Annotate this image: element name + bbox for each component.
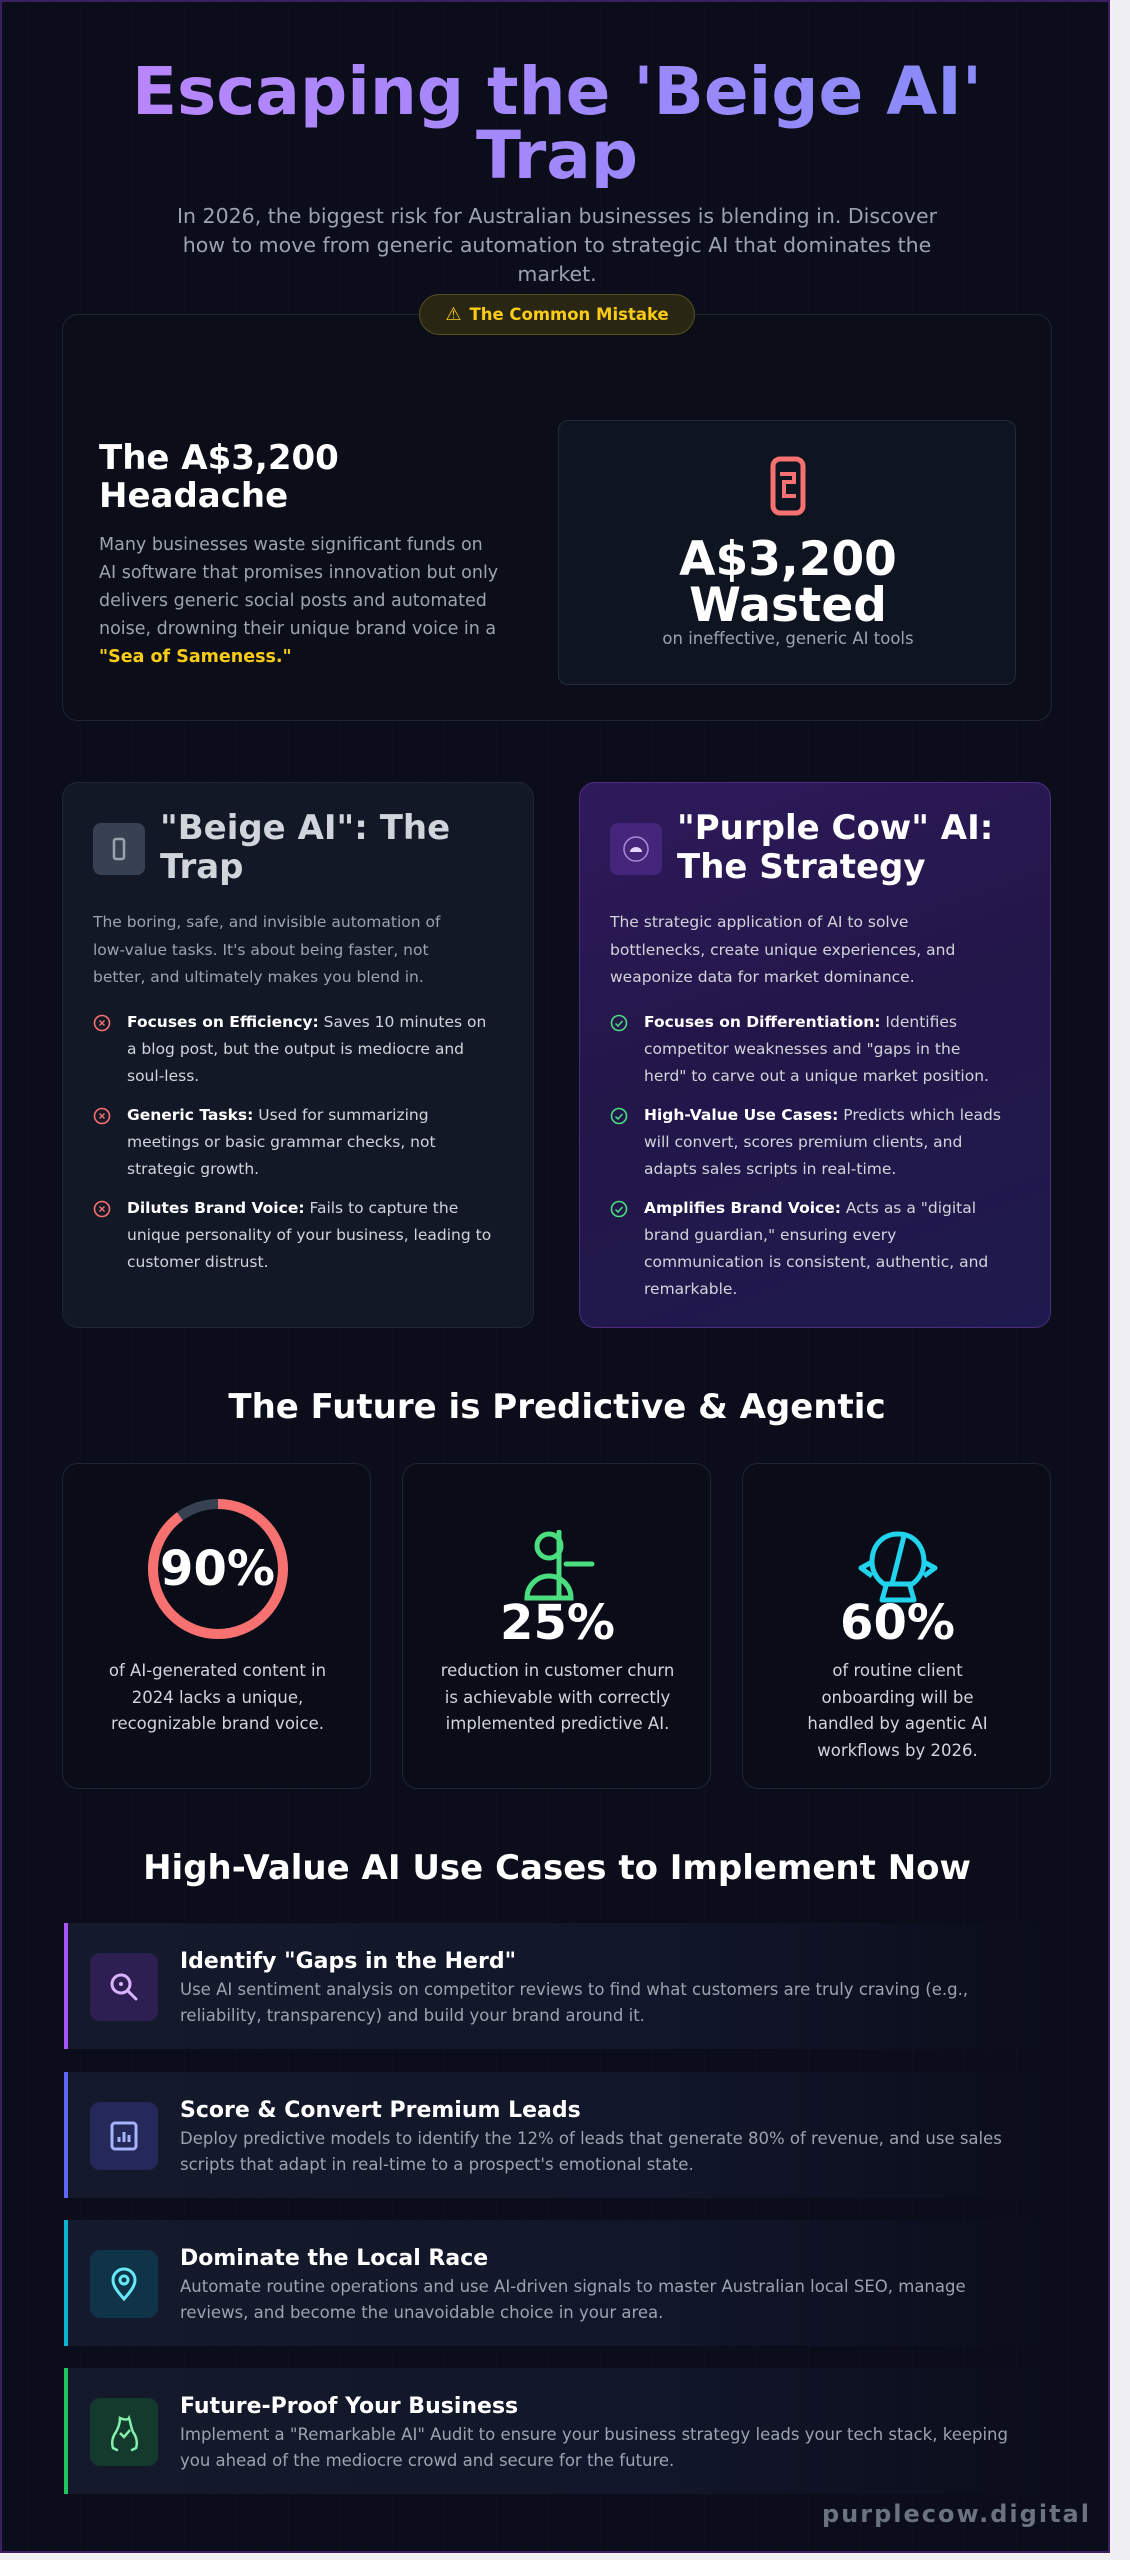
text: local: Automate routine operations and use AI-driven signals to master Australian local SEO, manage reviews, and become the unavoidable choice in your area. [180,2277,966,2322]
text: gaps: Use AI sentiment analysis on competitor reviews to find what customers are truly craving (e.g., reliability, transparency) and build your brand around it. [180,1980,968,2025]
icon: user minus [524,1530,594,1600]
badge: common mistake: The Common Mistake [469,305,669,324]
text: leads: Deploy predictive models to identify the 12% of leads that generate 80% of revenue, and use sales scripts that adapt in real-time to a prospect's emotional state. [180,2129,1002,2174]
use case: premium leads [64,2072,1054,2198]
text: headache description: "Sea of Sameness." [99,647,292,667]
icon: red phone [770,456,806,516]
panel: beige AI [62,782,534,1328]
heading: purple cow: The Strategy [677,847,926,887]
list: beige bullets: Focuses on Efficiency: Saves 10 minutes on a blog post, but the output is mediocre and soul-less. [127,1013,486,1085]
title [2,60,1112,188]
panel: common mistake [62,314,1052,721]
text: stat 60 caption: of routine client onboarding will be handled by agentic AI workflows by 2026. [807,1661,988,1760]
heading: purple cow: "Purple Cow" AI: [677,808,993,848]
card: stat 25% [402,1463,711,1789]
subtitle: In 2026, the biggest risk for Australian businesses is blending in. Discover [177,204,937,228]
text: beige description: The boring, safe, and invisible automation of low-value tasks. It's about being faster, not better, and ultimately makes you blend in. [93,913,440,986]
list: purple bullets: Amplifies Brand Voice: Acts as a "digital brand guardian," ensuring every communication is consistent, authentic, and remarkable. [644,1199,988,1298]
badge: common mistake [419,294,695,335]
text: headache description: AI software that promises innovation but only [99,563,498,583]
use case: local race [64,2220,1054,2346]
list: purple bullets [610,1013,1001,1298]
list: purple bullets: Focuses on Differentiation: Identifies competitor weaknesses and "gaps in the herd" to carve out a unique market position. [644,1013,989,1085]
stat: wasted amount [679,532,897,633]
callout: wasted box [558,420,1016,685]
text: headache description: Many businesses waste significant funds on [99,535,483,555]
list: beige bullets: Generic Tasks: Used for summarizing meetings or basic grammar checks, not strategic growth. [127,1106,436,1178]
card: stat 90% [62,1463,371,1789]
heading: headache: The A$3,200 [99,438,339,478]
text: stat 25 caption: reduction in customer churn is achievable with correctly implemented predictive AI. [441,1661,674,1733]
icon: shield [90,2398,158,2466]
title: Trap [476,117,638,194]
heading: gaps: Identify "Gaps in the Herd" [180,1949,516,1974]
heading: beige AI: Trap [160,847,244,887]
panel: purple cow AI [579,782,1051,1328]
icon: chart [90,2102,158,2170]
text: stat 90 caption: of AI-generated content in 2024 lacks a unique, recognizable brand voice. [109,1661,326,1733]
list: purple bullets: High-Value Use Cases: Predicts which leads will convert, scores premium clients, and adapts sales scripts in real-time. [644,1106,1001,1178]
icon: map pin [90,2250,158,2318]
stat: wasted amount: A$3,200 [679,532,897,587]
icon: purple cow [610,823,662,875]
footer: brand: purplecow.digital [822,2500,1091,2528]
stat: wasted amount: Wasted [689,578,887,633]
stat: 90%: 90% [160,1541,275,1597]
card: stat 60% [742,1463,1051,1789]
icon: search [90,1953,158,2021]
subtitle: market. [517,262,597,286]
heading: future-proof: Future-Proof Your Business [180,2394,518,2419]
icon: agent [858,1532,938,1602]
heading: beige AI [160,808,450,887]
list: beige bullets [94,1013,491,1271]
badge: common mistake: ⚠ [445,304,461,325]
text: headache description: delivers generic social posts and automated [99,591,487,611]
heading: headache [99,438,339,516]
stat: 25%: 25% [500,1595,615,1651]
use case: gaps in the herd [64,1923,1054,2049]
heading: local: Dominate the Local Race [180,2246,488,2271]
chart: ring 90% [148,1499,288,1639]
text: future-proof: Implement a "Remarkable AI" Audit to ensure your business strategy leads your tech stack, keeping you ahead of the mediocre crowd and secure for the future. [180,2425,1008,2470]
heading: purple cow [677,808,993,887]
use case: future-proof [64,2368,1054,2494]
title: Escaping the 'Beige AI' [132,53,982,130]
heading: headache: Headache [99,476,288,516]
text: headache description [99,535,498,667]
text: purple description: The strategic application of AI to solve bottlenecks, create unique experiences, and weaponize data for market dominance. [610,913,955,986]
subtitle [177,204,938,286]
text: wasted caption: on ineffective, generic AI tools [662,629,914,648]
stat: 60%: 60% [840,1595,955,1651]
subtitle: how to move from generic automation to strategic AI that dominates the [183,233,931,257]
heading: use cases: High-Value AI Use Cases to Implement Now [143,1848,971,1888]
heading: future: The Future is Predictive & Agentic [228,1387,886,1427]
heading: leads: Score & Convert Premium Leads [180,2098,581,2123]
heading: beige AI: "Beige AI": The [160,808,450,848]
list: beige bullets: Dilutes Brand Voice: Fails to capture the unique personality of your business, leading to customer distrust. [127,1199,491,1271]
text: headache description: noise, drowning their unique brand voice in a [99,619,496,639]
icon: beige phone [93,823,145,875]
